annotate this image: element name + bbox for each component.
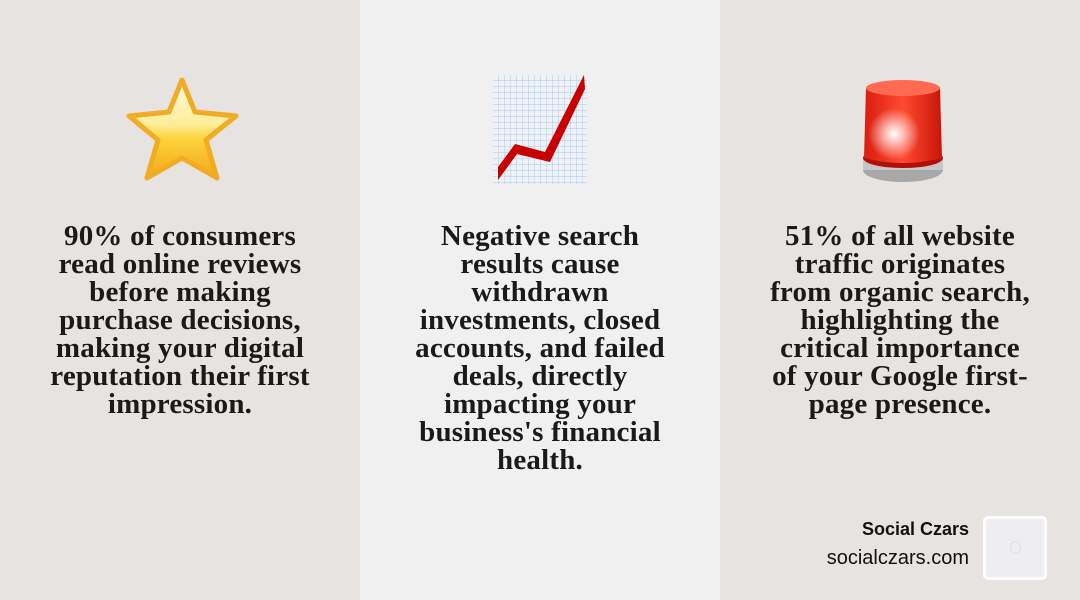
text: organic traffic stat: traffic originates xyxy=(795,248,1005,280)
icon: star xyxy=(126,78,238,180)
text: negative search stat: withdrawn xyxy=(471,276,609,308)
text: negative search stat: impacting your xyxy=(444,388,636,420)
text: negative search stat: accounts, and failed xyxy=(415,332,665,364)
text: organic traffic stat xyxy=(770,220,1030,420)
text: organic traffic stat: of your Google first- xyxy=(772,360,1028,392)
text: consumers stat: before making xyxy=(89,276,271,308)
icon: siren xyxy=(863,80,943,182)
text: organic traffic stat: from organic search, xyxy=(770,276,1030,308)
text: organic traffic stat: highlighting the xyxy=(800,304,1000,336)
text: website: socialczars.com xyxy=(827,547,969,569)
text: organic traffic stat: page presence. xyxy=(809,388,991,420)
text: consumers stat: impression. xyxy=(108,388,252,420)
text: organic traffic stat: critical importance xyxy=(780,332,1020,364)
text: negative search stat: Negative search xyxy=(441,220,639,252)
text: negative search stat: investments, closed xyxy=(420,304,660,336)
panel: organic traffic xyxy=(720,0,1080,600)
text: negative search stat xyxy=(415,220,665,476)
text: consumers stat xyxy=(50,220,310,420)
text: negative search stat: results cause xyxy=(460,248,620,280)
text: organic traffic stat: 51% of all website xyxy=(785,220,1015,252)
footer: brand xyxy=(827,516,1047,580)
logo box xyxy=(983,516,1047,580)
panel: negative search xyxy=(360,0,720,600)
text: consumers stat: making your digital xyxy=(56,332,304,364)
text: negative search stat: deals, directly xyxy=(453,360,627,392)
text: negative search stat: business's financial xyxy=(419,416,661,448)
icon: chart xyxy=(493,75,587,184)
panel: consumers xyxy=(0,0,360,600)
text: brand name: Social Czars xyxy=(862,519,969,539)
text: negative search stat: health. xyxy=(497,444,583,476)
text: consumers stat: read online reviews xyxy=(59,248,301,280)
text: consumers stat: reputation their first xyxy=(50,360,310,392)
text: consumers stat: 90% of consumers xyxy=(64,220,296,252)
text: consumers stat: purchase decisions, xyxy=(59,304,301,336)
